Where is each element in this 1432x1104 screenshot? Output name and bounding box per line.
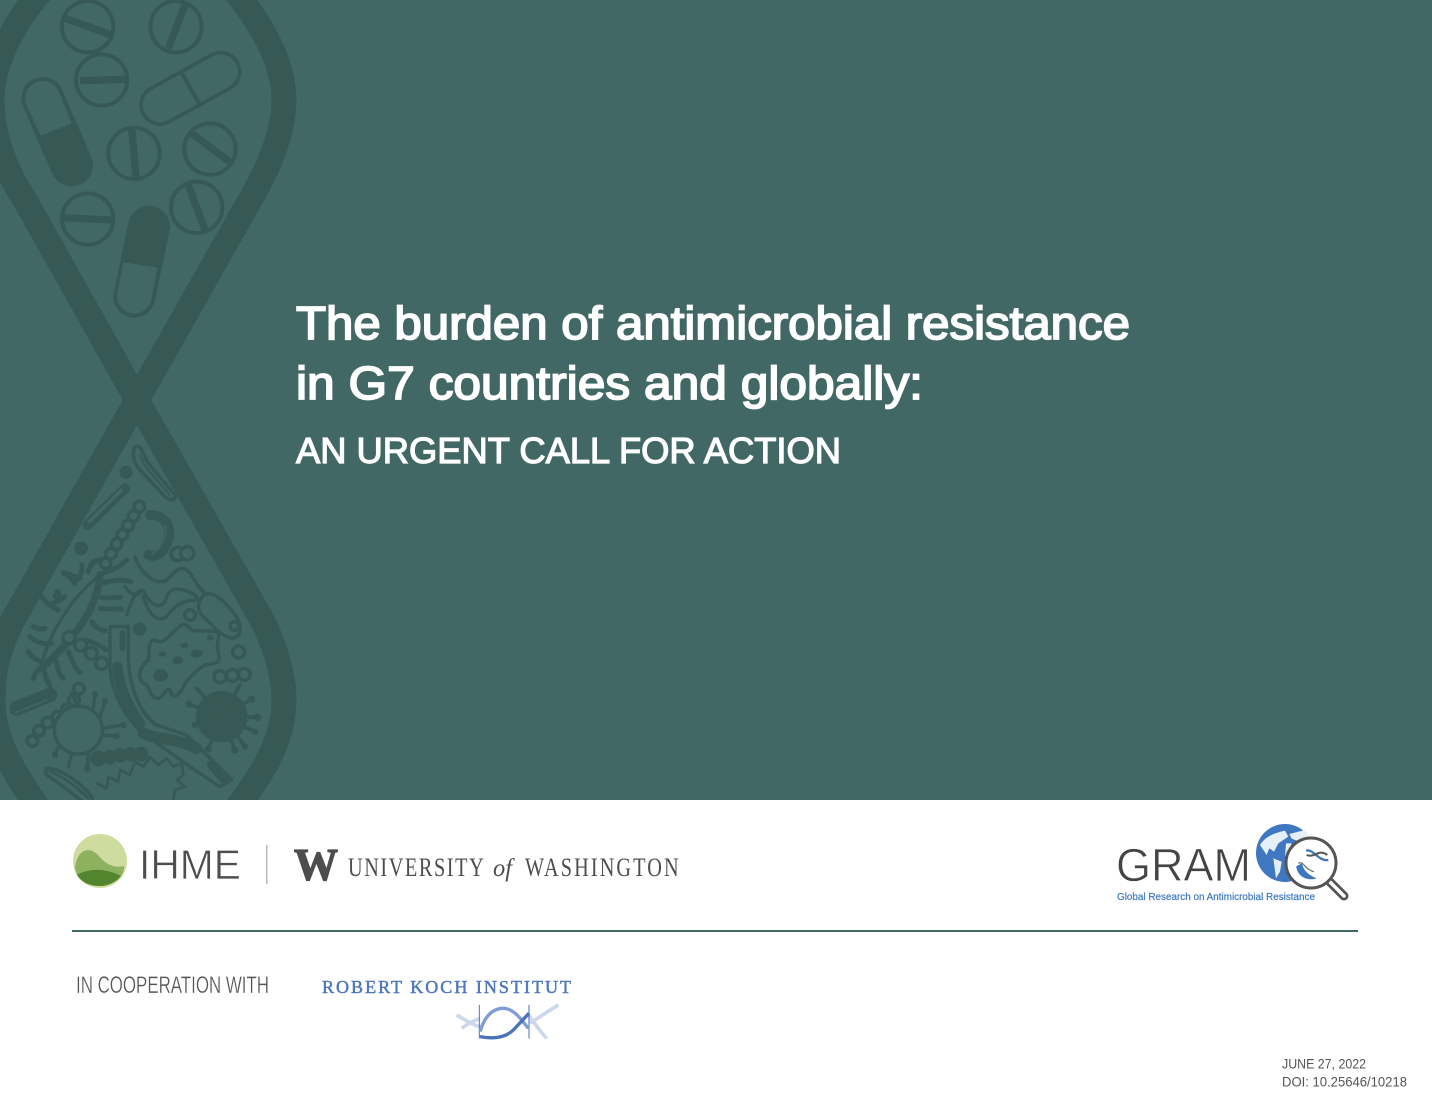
helix strands xyxy=(0,0,284,810)
icon: DNA helix xyxy=(457,1005,558,1038)
wordmark: of xyxy=(493,855,515,882)
logo: University of Washington xyxy=(294,839,679,890)
panel: teal cover background xyxy=(0,0,1432,800)
icon: W mark: W xyxy=(294,839,338,890)
date: JUNE 27, 2022 xyxy=(1282,1056,1366,1072)
capsule: diagonal outline xyxy=(160,72,221,105)
jagged spiky cell xyxy=(97,757,185,800)
rule xyxy=(72,930,1358,932)
RKI wordmark: ROBERT KOCH INSTITUT xyxy=(322,977,571,997)
icon: globe xyxy=(1256,824,1314,882)
title line 1: The burden of antimicrobial resistance xyxy=(296,297,1130,349)
round tablets xyxy=(62,1,236,245)
wiggly flagella xyxy=(135,557,203,592)
IHME wordmark: IHME xyxy=(139,841,241,888)
logo: GRAM xyxy=(1116,824,1344,903)
capsule: half filled bottom xyxy=(117,227,157,313)
logo: Robert Koch Institut xyxy=(322,977,571,1038)
wordmark xyxy=(348,854,679,883)
logo: IHME xyxy=(73,834,241,888)
beaded chains xyxy=(27,501,250,746)
icon: IHME landscape circle xyxy=(73,834,127,888)
title line 2: in G7 countries and globally: xyxy=(296,357,923,409)
rods xyxy=(133,446,175,500)
DOI: DOI: 10.25646/10218 xyxy=(1282,1074,1407,1090)
icon: magnifying glass xyxy=(1286,838,1344,896)
dots xyxy=(74,466,146,636)
capsule with round end xyxy=(199,594,240,638)
flagellated leaf bacterium xyxy=(28,560,131,686)
GRAM wordmark: GRAM xyxy=(1116,839,1251,891)
date and DOI xyxy=(1282,1056,1407,1090)
filled virus xyxy=(185,685,261,754)
wordmark: WASHINGTON xyxy=(525,854,679,883)
cooperation label: IN COOPERATION WITH xyxy=(76,972,269,999)
wordmark: UNIVERSITY xyxy=(348,854,484,883)
icon: pills and capsules xyxy=(25,1,236,313)
divider between logos xyxy=(266,845,268,884)
capsule: half filled left xyxy=(25,81,72,165)
outlined virus xyxy=(52,691,127,772)
title xyxy=(296,297,1130,409)
amoeba xyxy=(140,625,219,698)
icon: microbes xyxy=(15,446,261,803)
long curved bacterium xyxy=(110,627,232,787)
illustration: double helix with pills and microbes xyxy=(0,0,284,810)
GRAM tagline: Global Research on Antimicrobial Resistance xyxy=(1117,892,1315,903)
dark bumpy chain xyxy=(90,747,148,766)
subtitle: AN URGENT CALL FOR ACTION xyxy=(296,430,841,471)
